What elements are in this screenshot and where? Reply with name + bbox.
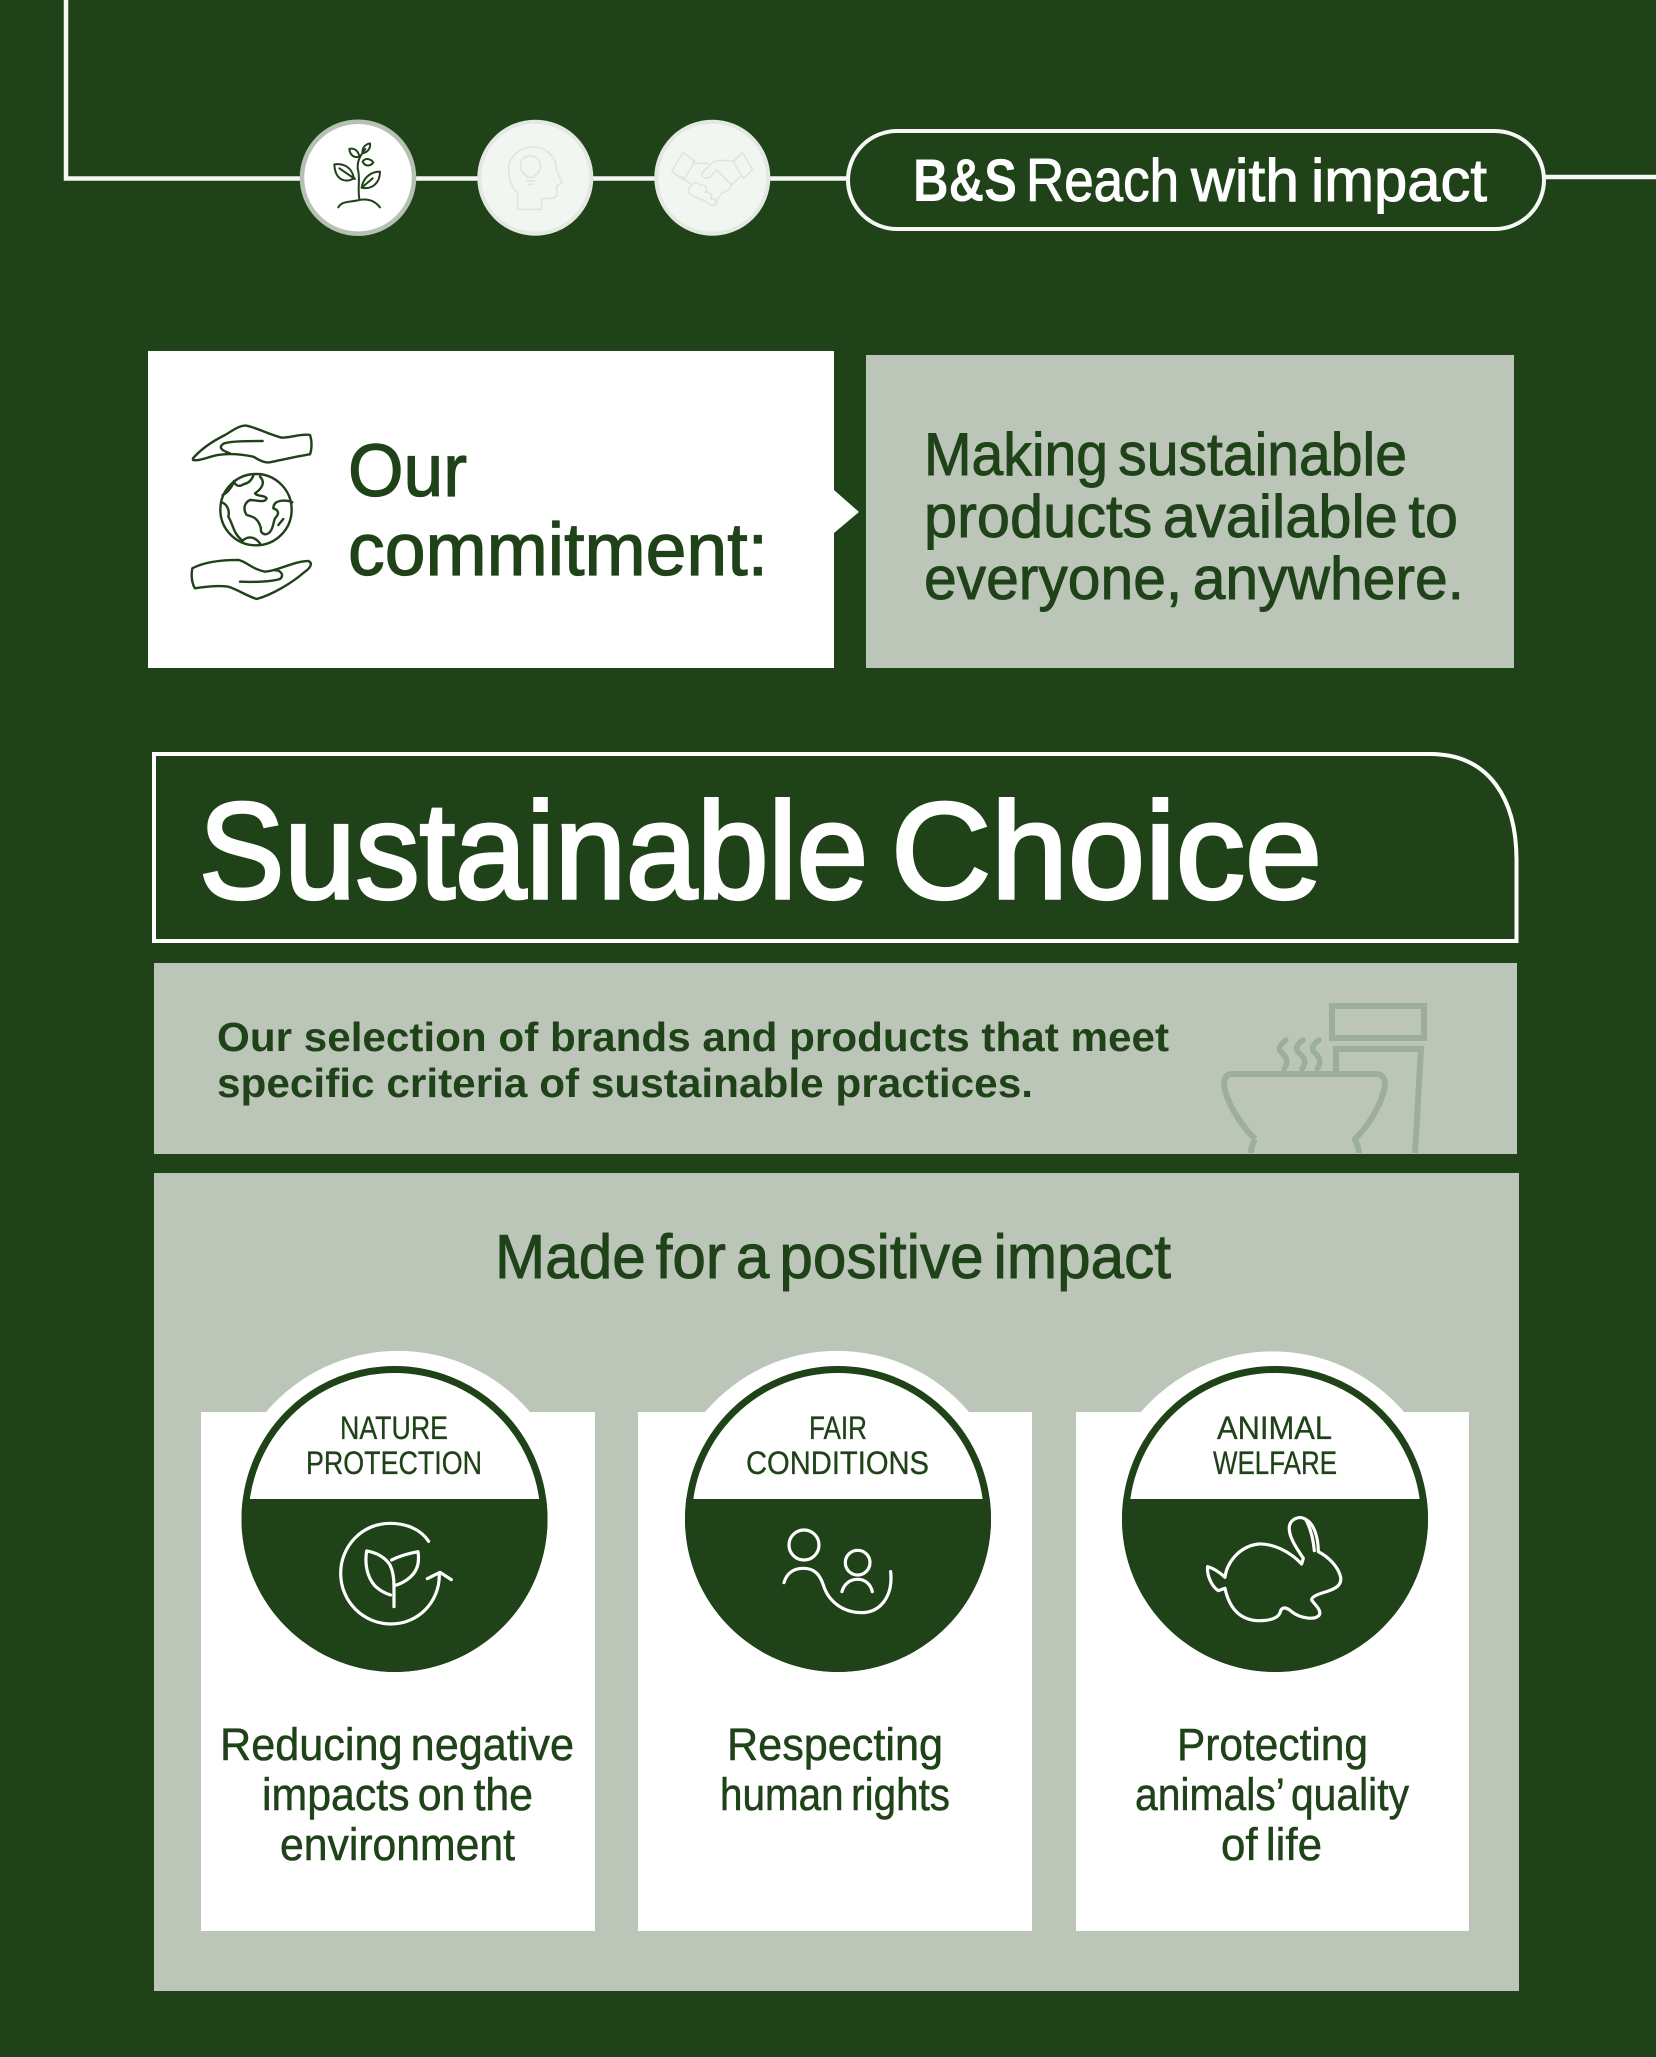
commitment statement text bbox=[924, 421, 1464, 612]
badge: animal welfare bbox=[1122, 1370, 1428, 1672]
main heading: Choice bbox=[891, 775, 1322, 928]
pill label text bbox=[1026, 147, 1487, 214]
pill label text: Reach bbox=[1026, 147, 1179, 214]
definition text: specific criteria of sustainable practices. bbox=[217, 1060, 1033, 1106]
header connector line bbox=[66, 0, 1656, 178]
card: fair conditions bbox=[638, 1351, 1032, 1931]
badge label: FAIR bbox=[809, 1410, 867, 1446]
main heading: Sustainable bbox=[199, 775, 868, 928]
commitment statement text: everyone, anywhere. bbox=[924, 545, 1464, 612]
section heading: Made for a positive impact bbox=[495, 1223, 1171, 1292]
card description: human rights bbox=[720, 1769, 950, 1820]
icon: hands around globe bbox=[192, 426, 311, 599]
icon: rabbit bbox=[1208, 1518, 1341, 1621]
heading: our commitment bbox=[348, 429, 768, 591]
badge label: WELFARE bbox=[1213, 1445, 1337, 1481]
card: animal welfare bbox=[1076, 1351, 1469, 1931]
panel: definition bbox=[154, 963, 1517, 1154]
badge label: NATURE bbox=[340, 1410, 448, 1446]
card description bbox=[720, 1719, 950, 1820]
card description bbox=[220, 1719, 574, 1870]
panel: sustainable choice title bbox=[154, 754, 1516, 941]
icon: leaf in cycle arrow bbox=[341, 1523, 451, 1624]
card description: animals’ quality bbox=[1135, 1769, 1409, 1820]
pill brand text: B&S bbox=[913, 147, 1017, 214]
commitment statement text: Making sustainable bbox=[924, 421, 1407, 488]
badge label: PROTECTION bbox=[306, 1445, 482, 1481]
heading: our commitment: commitment: bbox=[348, 508, 768, 591]
card description: of life bbox=[1221, 1819, 1322, 1870]
card description: impacts on the bbox=[262, 1769, 533, 1820]
card description: environment bbox=[280, 1819, 515, 1870]
card description: Respecting bbox=[727, 1719, 943, 1770]
badge: nature protection bbox=[241, 1370, 547, 1672]
step icon: handshake (inactive) bbox=[656, 122, 768, 234]
pill label text: with bbox=[1190, 147, 1299, 214]
badge label: ANIMAL bbox=[1217, 1410, 1332, 1446]
step icon: seedling (active) bbox=[302, 122, 414, 234]
definition text bbox=[217, 1014, 1169, 1106]
badge label: CONDITIONS bbox=[746, 1445, 929, 1481]
step icon: head with lightbulb (inactive) bbox=[479, 122, 591, 234]
badge label bbox=[1213, 1410, 1337, 1481]
badge label bbox=[306, 1410, 482, 1481]
card description bbox=[1135, 1719, 1409, 1870]
badge: fair conditions bbox=[685, 1370, 991, 1672]
card description: Reducing negative bbox=[220, 1719, 574, 1770]
icon: bowl and pouch bbox=[1224, 1006, 1424, 1153]
panel: our commitment bbox=[148, 351, 859, 668]
main heading bbox=[199, 775, 1322, 928]
card: nature protection bbox=[201, 1351, 595, 1931]
card description: Protecting bbox=[1177, 1719, 1368, 1770]
panel: commitment statement bbox=[866, 355, 1514, 668]
panel: made for a positive impact bbox=[154, 1173, 1519, 1991]
pill label text: impact bbox=[1311, 147, 1487, 214]
definition text: Our selection of brands and products that meet bbox=[217, 1014, 1169, 1060]
commitment statement text: products available to bbox=[924, 483, 1458, 550]
heading: our commitment: Our bbox=[348, 429, 467, 512]
header pill bbox=[848, 131, 1544, 229]
badge label bbox=[746, 1410, 929, 1481]
icon: two people with curve bbox=[784, 1530, 891, 1613]
